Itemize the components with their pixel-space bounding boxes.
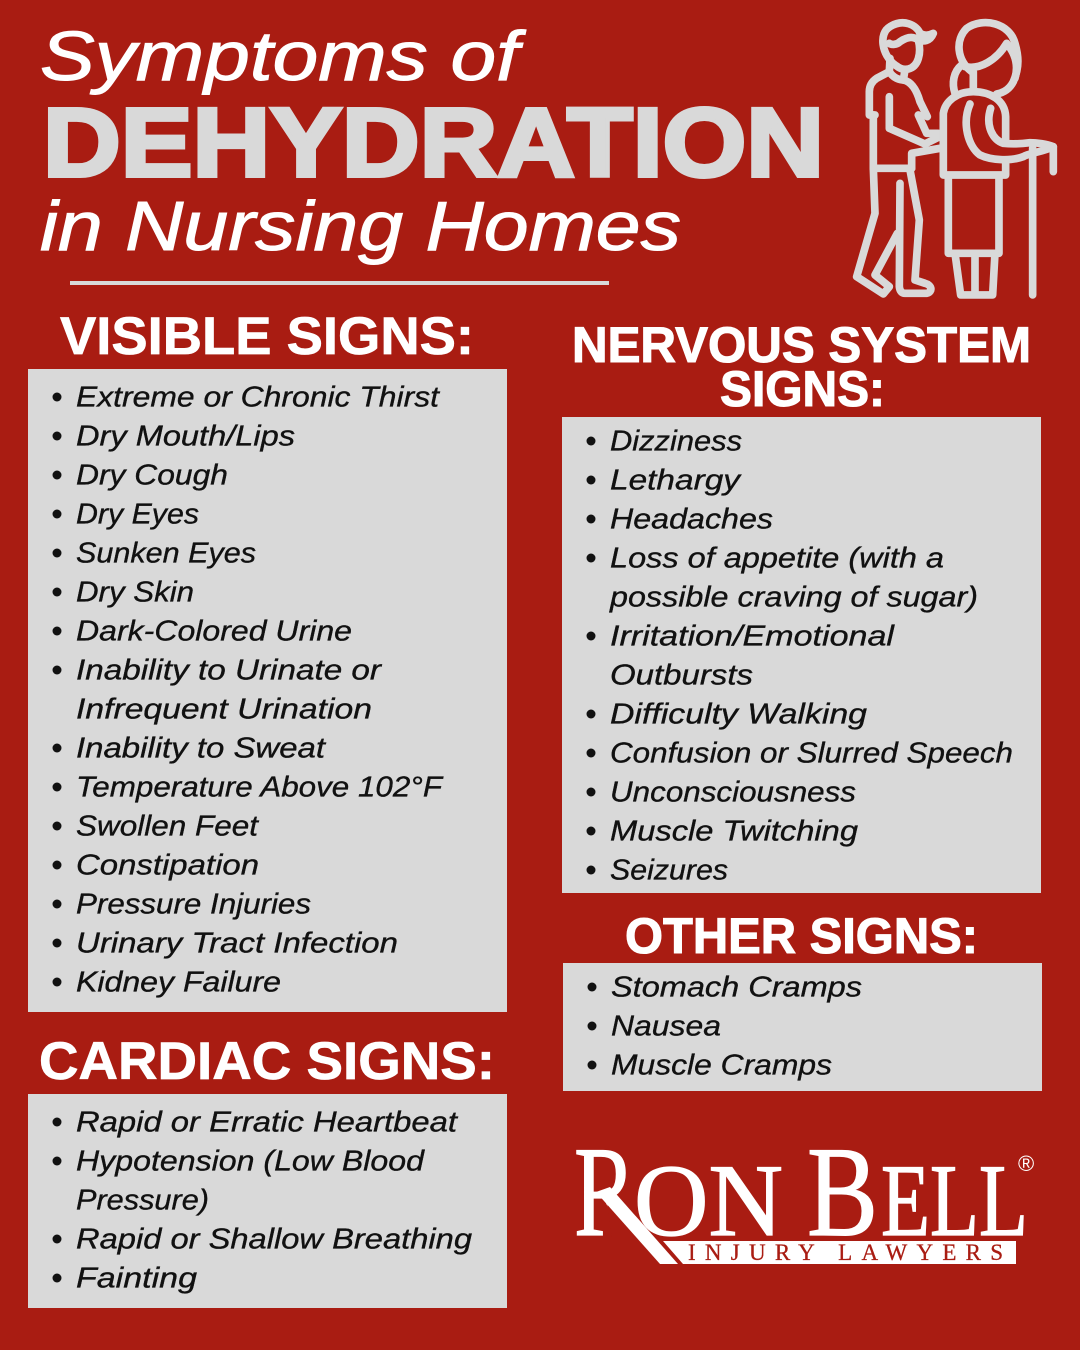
list item [52, 655, 383, 726]
list item: Swollen Feet [76, 811, 259, 843]
logo: Ron Bell Injury Lawyers: ELL [881, 1144, 1028, 1258]
heading: nervous system signs: NERVOUS SYSTEM [572, 317, 1031, 373]
list item [52, 1146, 425, 1217]
list item: Irritation/Emotional [610, 621, 895, 653]
logo: Ron Bell Injury Lawyers: INJURY LAWYERS [688, 1240, 1003, 1265]
panel background [563, 963, 1042, 1091]
list item: Difficulty Walking [610, 699, 867, 731]
list item [586, 621, 895, 692]
list item: Dry Cough [76, 460, 228, 492]
panel background [28, 1094, 507, 1308]
list item: Nausea [611, 1011, 721, 1043]
panel: other signs [563, 963, 1042, 1091]
list item [586, 543, 978, 614]
list item: Loss of appetite (with a [610, 543, 944, 575]
list item: Muscle Cramps [611, 1050, 832, 1082]
heading: nervous system signs: SIGNS: [720, 361, 885, 417]
list item: Constipation [76, 850, 259, 882]
title line: in Nursing Homes: in Nursing Homes [40, 187, 681, 265]
title line: Symptoms of: Symptoms of [40, 17, 527, 95]
list item: Pressure Injuries [76, 889, 311, 921]
list item: Dark-Colored Urine [76, 616, 352, 648]
list item: Pressure) [76, 1185, 209, 1217]
list item: Rapid or Erratic Heartbeat [76, 1107, 458, 1139]
list item: Dry Eyes [76, 499, 199, 531]
heading: visible signs: VISIBLE SIGNS: [60, 307, 474, 366]
logo: Ron Bell Injury Lawyers: ® [1018, 1151, 1034, 1176]
list item: Outbursts [610, 660, 753, 692]
panel: cardiac signs [28, 1094, 507, 1308]
heading: other signs: OTHER SIGNS: [625, 908, 978, 964]
list item: Unconsciousness [610, 777, 856, 809]
logo: Ron Bell Injury Lawyers [574, 1120, 1034, 1265]
list item: Dry Skin [76, 577, 194, 609]
list item: Urinary Tract Infection [76, 928, 398, 960]
panel: nervous system signs [562, 417, 1041, 893]
list item: Temperature Above 102°F [76, 772, 444, 804]
list item: Inability to Sweat [76, 733, 326, 765]
heading: nervous system signs [572, 317, 1031, 417]
list item: Inability to Urinate or [76, 655, 383, 687]
list item: Dizziness [610, 426, 742, 458]
list item: Confusion or Slurred Speech [610, 738, 1013, 770]
list item: Muscle Twitching [610, 816, 858, 848]
list item: Hypotension (Low Blood [76, 1146, 425, 1178]
list item: Extreme or Chronic Thirst [76, 382, 440, 414]
list item: Rapid or Shallow Breathing [76, 1224, 472, 1256]
list item: Kidney Failure [76, 967, 281, 999]
list item: Fainting [76, 1263, 197, 1295]
title [40, 17, 824, 265]
logo: Ron Bell Injury Lawyers: ON [634, 1144, 783, 1258]
title line: DEHYDRATION: DEHYDRATION [43, 88, 824, 197]
logo: Ron Bell Injury Lawyers: R [574, 1120, 636, 1263]
logo: Ron Bell Injury Lawyers: B [807, 1120, 878, 1263]
panel background [28, 369, 507, 1012]
list item: Stomach Cramps [611, 972, 862, 1004]
heading: cardiac signs: CARDIAC SIGNS: [39, 1032, 495, 1091]
list item: Infrequent Urination [76, 694, 372, 726]
list item: Seizures [610, 855, 728, 887]
icon: caregiver helping elderly woman with cane [857, 23, 1053, 295]
list item: Dry Mouth/Lips [76, 421, 295, 453]
list item: possible craving of sugar) [609, 582, 978, 614]
list item: Lethargy [610, 465, 742, 497]
list item: Sunken Eyes [76, 538, 256, 570]
panel: visible signs [28, 369, 507, 1012]
panel background [562, 417, 1041, 893]
list item: Headaches [610, 504, 773, 536]
